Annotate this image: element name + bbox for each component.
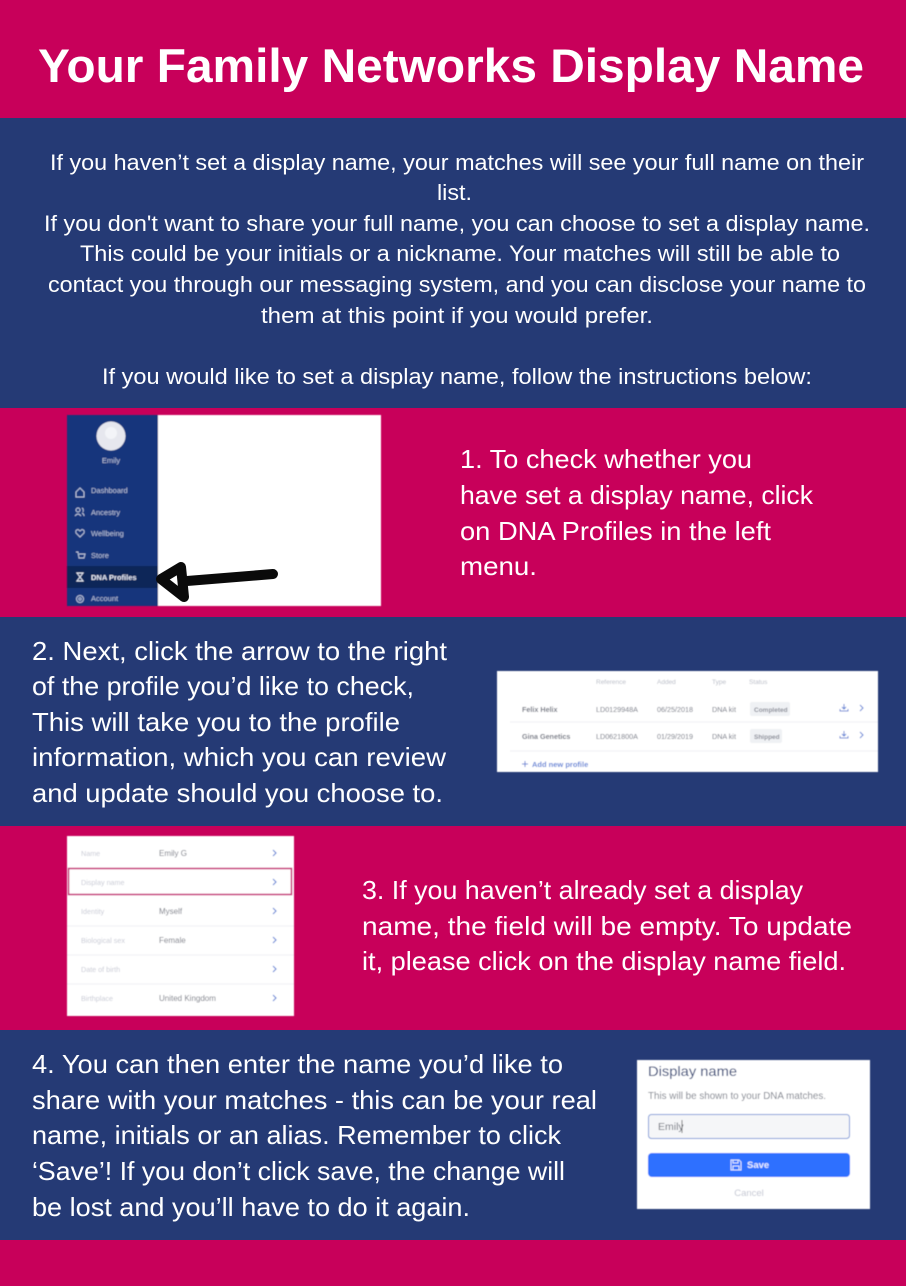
screenshot: profile table: LD0129948A	[596, 705, 638, 714]
screenshot: profile table: Completed	[754, 707, 788, 714]
screenshot: profile table: DNA kit	[712, 705, 736, 714]
arrow: pointing to DNA Profiles	[161, 567, 273, 597]
step 1 text: have set a display name, click	[460, 480, 814, 510]
screenshot: profile table: 06/25/2018	[657, 705, 693, 714]
screenshot: profile table: Reference	[596, 679, 626, 686]
panel: introduction: contact you through our messaging system, and you can disclose your name to	[48, 272, 866, 297]
step 4 text	[32, 1049, 597, 1222]
save button: Save	[747, 1160, 769, 1171]
step 4 text: ‘Save’! If you don’t click save, the change will	[32, 1156, 565, 1186]
panel: introduction: If you would like to set a display name, follow the instructions below:	[102, 364, 812, 389]
screenshot: profile table: Add new profile	[532, 760, 588, 769]
screenshot: profile fields	[67, 836, 294, 1016]
screenshot: profile fields: Name	[81, 849, 100, 858]
step 1 text: menu.	[460, 551, 537, 581]
panel: step 2	[0, 617, 906, 826]
screenshot: profile table	[497, 671, 878, 772]
screenshot: profile fields: Date of birth	[81, 965, 120, 974]
panel: introduction: If you haven’t set a display name, your matches will see your full name on their	[50, 150, 864, 175]
screenshot: profile fields: Identity	[81, 907, 105, 916]
screenshot: sidebar menu: Dashboard	[91, 486, 128, 495]
step 3 text: it, please click on the display name field.	[362, 946, 846, 976]
screenshot: profile table: Felix Helix	[522, 705, 558, 714]
step 2 text: 2. Next, click the arrow to the right	[32, 636, 448, 666]
screenshot: profile table: Gina Genetics	[522, 732, 570, 741]
screenshot: profile table: LD0621800A	[596, 732, 638, 741]
step 2 text: This will take you to the profile	[32, 707, 400, 737]
screenshot: sidebar menu: Emily	[102, 456, 120, 465]
panel: step 1	[0, 408, 906, 617]
title banner: Your Family Networks Display Name	[38, 39, 864, 92]
panel: introduction: them at this point if you would prefer.	[261, 303, 653, 328]
screenshot: display name dialog: This will be shown to your DNA matches.	[648, 1091, 826, 1102]
step 4 text: 4. You can then enter the name you’d like to	[32, 1049, 563, 1079]
screenshot: profile fields: Emily G	[159, 849, 187, 858]
screenshot: sidebar menu: Wellbeing	[91, 529, 124, 538]
screenshot: profile fields: Female	[159, 936, 186, 945]
step 4 text: name, initials or an alias. Remember to click	[32, 1120, 562, 1150]
screenshot: profile fields: Biological sex	[81, 936, 125, 945]
step 1 text	[460, 444, 814, 581]
screenshot: profile fields: Myself	[159, 907, 183, 916]
step 3 text	[362, 875, 852, 976]
panel: step 4	[0, 1030, 906, 1240]
step 2 text	[32, 636, 448, 808]
screenshot: display name dialog: Display name	[648, 1063, 737, 1079]
screenshot: sidebar menu	[67, 415, 381, 606]
screenshot: sidebar menu: Account	[91, 594, 119, 603]
step 3 text: name, the field will be empty. To update	[362, 911, 852, 941]
panel: introduction	[0, 118, 906, 408]
screenshot: profile table: DNA kit	[712, 732, 736, 741]
screenshot: profile fields: Display name	[81, 878, 125, 887]
footer band	[0, 1240, 906, 1286]
screenshot: sidebar menu: DNA Profiles	[91, 573, 137, 582]
step 3 text: 3. If you haven’t already set a display	[362, 875, 803, 905]
screenshot: sidebar menu: Ancestry	[91, 508, 120, 517]
screenshot: sidebar menu: Store	[91, 551, 109, 560]
name input: Emily	[658, 1121, 684, 1133]
screenshot: display name dialog	[637, 1060, 870, 1209]
step 2 text: and update should you choose to.	[32, 778, 443, 808]
panel: introduction: If you don't want to share your full name, you can choose to set a display name.	[44, 211, 870, 236]
screenshot: profile table: Type	[712, 679, 726, 686]
panel: introduction: list.	[437, 180, 472, 205]
step 4 text: be lost and you’ll have to do it again.	[32, 1192, 470, 1222]
screenshot: profile table: 01/29/2019	[657, 732, 693, 741]
title banner	[0, 0, 906, 118]
screenshot: profile table: Status	[749, 679, 768, 686]
step 4 text: share with your matches - this can be your real	[32, 1085, 597, 1115]
step 2 text: information, which you can review	[32, 742, 446, 772]
panel: introduction: This could be your initials or a nickname. Your matches will still be able to	[80, 241, 840, 266]
screenshot: profile table: Shipped	[754, 734, 780, 741]
save button	[648, 1153, 850, 1177]
screenshot: profile fields: United Kingdom	[159, 994, 216, 1003]
step 1 text: 1. To check whether you	[460, 444, 752, 474]
screenshot: profile table: Added	[657, 679, 676, 686]
screenshot: display name dialog: Cancel	[734, 1188, 764, 1199]
name input	[648, 1114, 850, 1138]
panel: step 3	[0, 826, 906, 1030]
step 1 text: on DNA Profiles in the left	[460, 516, 772, 546]
step 2 text: of the profile you’d like to check,	[32, 671, 414, 701]
screenshot: profile fields: Birthplace	[81, 994, 113, 1003]
